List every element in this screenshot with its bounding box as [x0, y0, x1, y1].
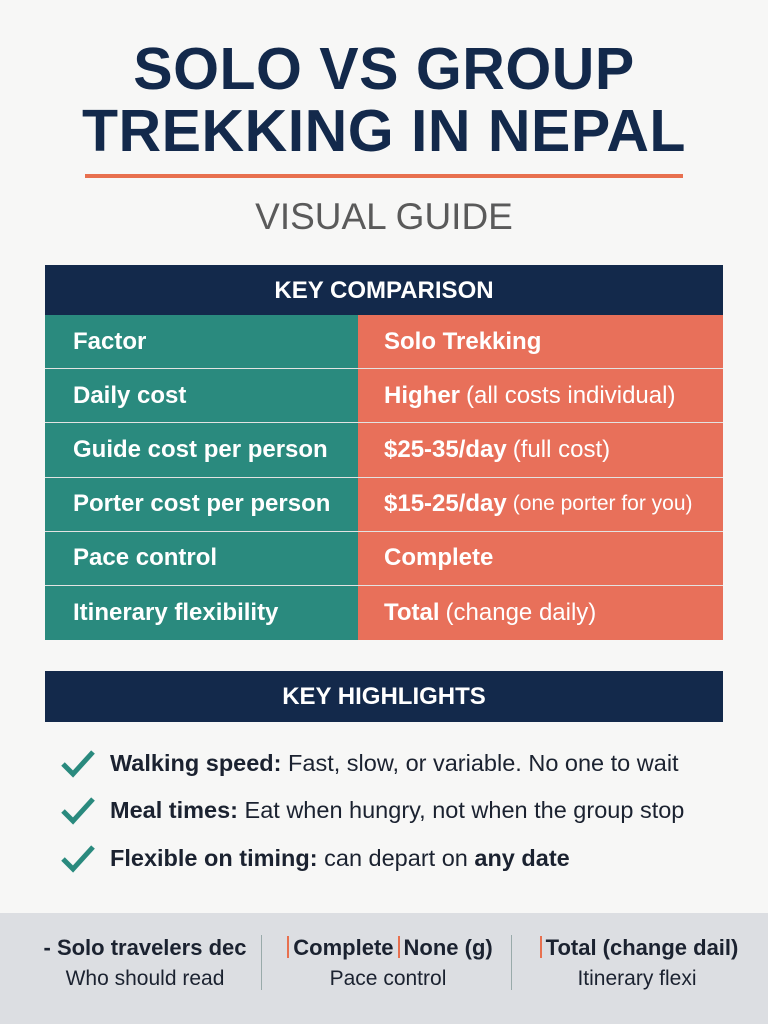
highlight 3: Flexible on timing: can depart on any date — [110, 844, 570, 870]
comparison table: Complete — [384, 544, 493, 571]
comparison table: Total — [384, 599, 440, 626]
title: TREKKING IN NEPAL — [82, 98, 686, 164]
comparison table: (full cost) — [513, 436, 610, 463]
stat: pace control: Complete None (g) — [293, 935, 493, 960]
comparison table: $15-25/day — [384, 490, 507, 517]
highlight 1: Walking speed: Fast, slow, or variable. No one to wait — [110, 750, 679, 776]
heading: key highlights: KEY HIGHLIGHTS — [282, 683, 486, 710]
heading: key comparison — [45, 265, 723, 315]
footer stats — [0, 913, 768, 1024]
heading: key comparison: KEY COMPARISON — [274, 277, 494, 304]
comparison table: Guide cost per person — [73, 436, 328, 463]
comparison table — [45, 315, 723, 640]
title: SOLO VS GROUP — [133, 36, 635, 102]
highlight 2: Meal times: Eat when hungry, not when the group stop — [110, 796, 684, 822]
stat: pace control: Pace control — [330, 967, 446, 990]
comparison table: Higher — [384, 382, 460, 409]
stat: itinerary: Total (change dail) — [546, 935, 738, 960]
subtitle: VISUAL GUIDE — [255, 196, 513, 237]
comparison table: $25-35/day — [384, 436, 507, 463]
comparison table: Porter cost per person — [73, 490, 330, 517]
stat: who should read: - Solo travelers dec — [44, 935, 246, 960]
comparison table: (all costs individual) — [466, 382, 675, 409]
comparison table: Pace control — [73, 544, 217, 571]
stat: itinerary: Itinerary flexi — [577, 967, 697, 990]
stat: who should read: Who should read — [66, 967, 224, 990]
comparison table: Daily cost — [73, 382, 186, 409]
stat: who should read — [44, 935, 246, 990]
stat: itinerary — [540, 935, 738, 990]
comparison table: Itinerary flexibility — [73, 599, 278, 626]
stat: pace control — [287, 935, 493, 990]
heading: key highlights — [45, 671, 723, 722]
comparison table: Factor — [73, 328, 146, 355]
comparison table: (one porter for you) — [513, 492, 693, 515]
title — [82, 36, 686, 164]
comparison table: (change daily) — [446, 599, 596, 626]
comparison table: Solo Trekking — [384, 328, 541, 355]
